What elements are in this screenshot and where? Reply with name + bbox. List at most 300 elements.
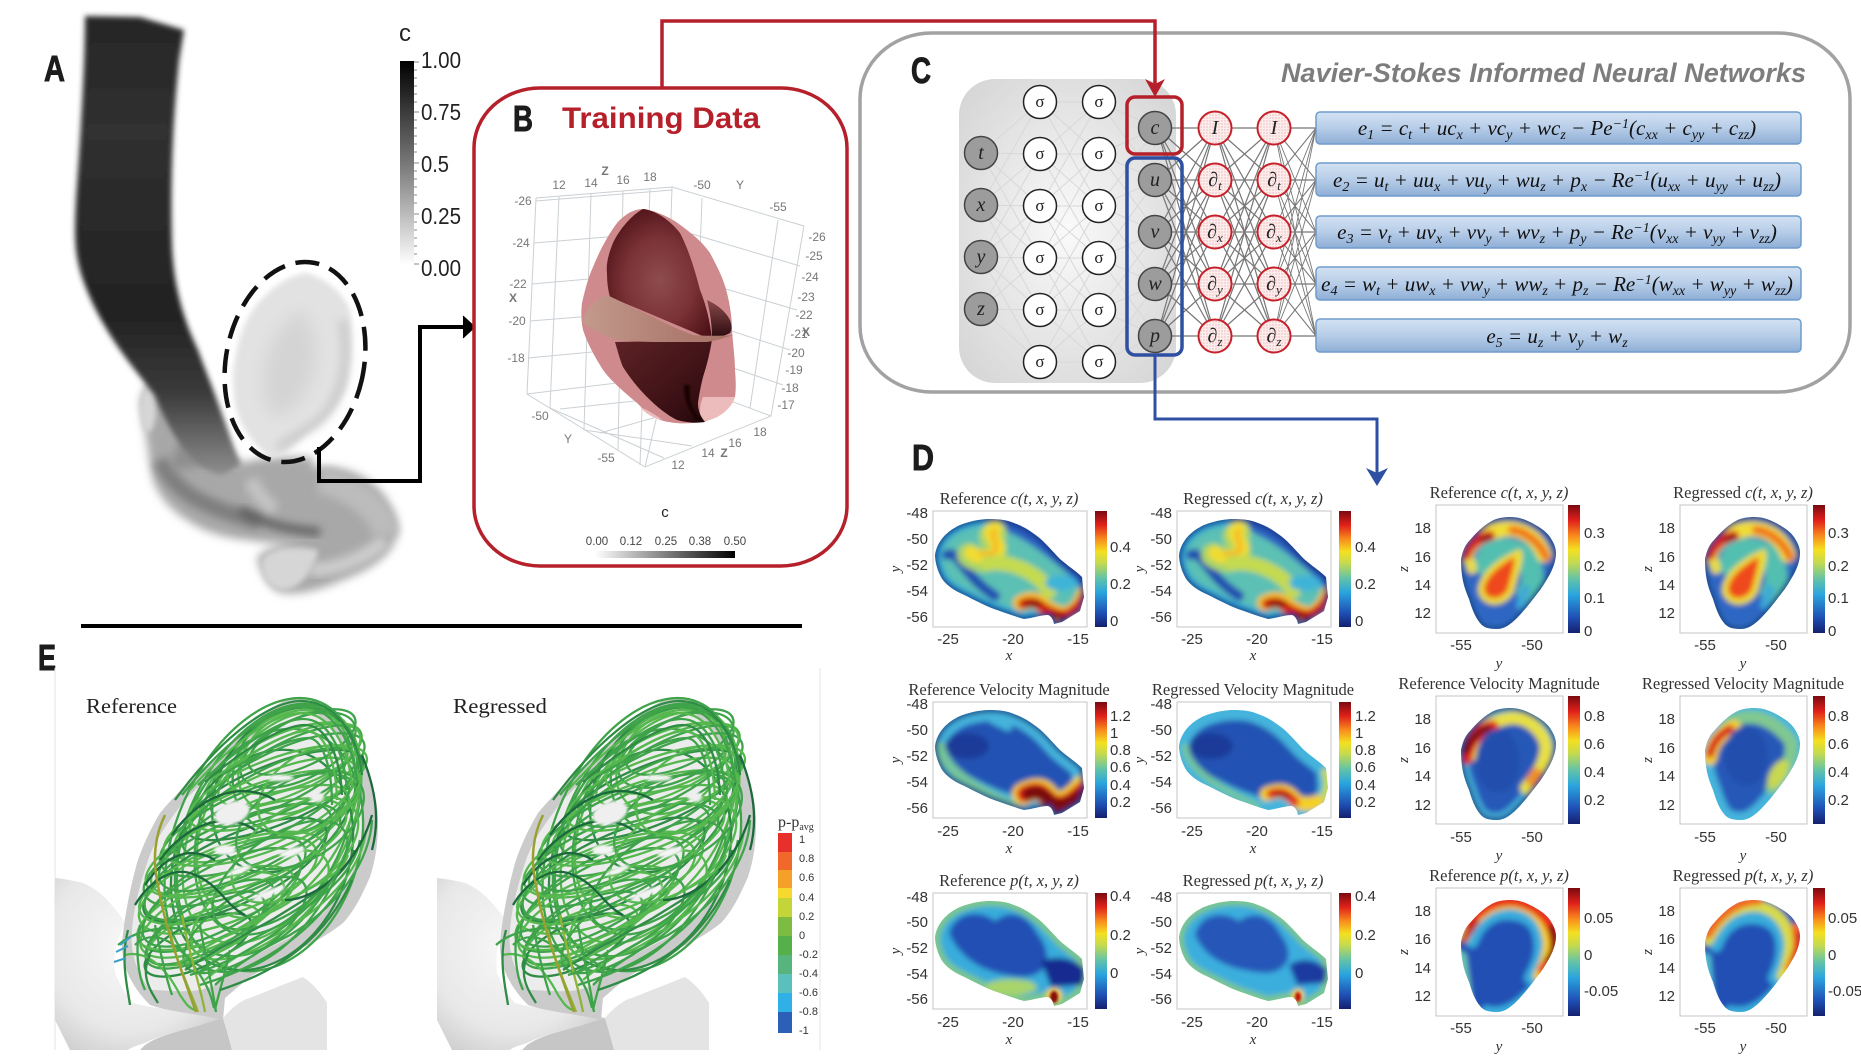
blue selection box around u v w p bbox=[1127, 158, 1182, 355]
3D axis labels bbox=[507, 164, 826, 472]
derivative nodes: z bbox=[1216, 334, 1222, 349]
equation e1: t bbox=[1408, 128, 1413, 143]
plot: regressed c xy: Regressed c(t, x, y, z) bbox=[1183, 489, 1323, 508]
plot: regressed velocity yz: 14 bbox=[1658, 768, 1675, 785]
plot: reference p xy: -48 bbox=[906, 889, 928, 906]
left anatomy with reference streamlines bbox=[55, 668, 399, 1050]
plot: regressed c xy: -20 bbox=[1246, 631, 1268, 648]
plot: regressed p xy: -56 bbox=[1150, 991, 1172, 1008]
plot: regressed c yz: Regressed c(t, x, y, z) bbox=[1673, 483, 1813, 502]
3D axis labels: -26 bbox=[808, 230, 826, 244]
plot: regressed c xy: 0.4 bbox=[1355, 539, 1376, 556]
label E: E bbox=[38, 637, 56, 678]
plot: regressed p xy: 0.2 bbox=[1355, 927, 1376, 944]
arrow from network outputs to panel D bbox=[1155, 355, 1388, 486]
plot: regressed c xy: x bbox=[1249, 648, 1257, 664]
3D axes grid bbox=[527, 187, 804, 467]
colorbar c: 0.25 bbox=[421, 203, 461, 229]
hidden layer nodes: σ bbox=[1094, 300, 1104, 319]
plot: reference p xy: 0 bbox=[1110, 965, 1118, 982]
plot: regressed velocity yz: Regressed Velocity Magnitude bbox=[1642, 674, 1844, 693]
equation e1: x bbox=[1456, 128, 1464, 143]
hidden layer nodes: σ bbox=[1094, 92, 1104, 111]
plot: regressed p yz: 18 bbox=[1658, 903, 1675, 920]
plot: reference c xy: -48 bbox=[906, 505, 928, 522]
colorbar c: 1.00 bbox=[421, 47, 461, 73]
equation e3 bbox=[1316, 216, 1801, 248]
hidden layer nodes: σ bbox=[1094, 248, 1104, 267]
plot: reference p xy: 0.4 bbox=[1110, 888, 1131, 905]
equation e3: zz bbox=[1758, 232, 1770, 247]
equation e2: −1 bbox=[1634, 169, 1650, 184]
equation e4: = w bbox=[1337, 272, 1376, 296]
plot: regressed p xy: -50 bbox=[1150, 914, 1172, 931]
equation e5: z bbox=[1621, 336, 1628, 351]
equation e1: y bbox=[1504, 128, 1513, 143]
equation e3: y bbox=[1483, 232, 1492, 247]
derivative nodes bbox=[1198, 112, 1290, 352]
plot: regressed velocity xy: 1 bbox=[1355, 725, 1363, 742]
plot: regressed c yz: 14 bbox=[1658, 577, 1675, 594]
3D axis labels: 12 bbox=[671, 458, 685, 472]
equation e3: (v bbox=[1650, 220, 1667, 244]
derivative nodes: y bbox=[1215, 282, 1223, 297]
equation e1: 1 bbox=[1367, 128, 1374, 143]
derivative nodes: x bbox=[1275, 230, 1282, 245]
equation e4: (w bbox=[1652, 272, 1673, 296]
plot: reference p yz: 0.05 bbox=[1584, 910, 1613, 927]
equation e2: y bbox=[1483, 180, 1492, 195]
plot: reference velocity yz: 0.6 bbox=[1584, 736, 1605, 753]
label B: B bbox=[513, 98, 533, 139]
3D axis labels: X bbox=[802, 325, 810, 339]
plot: reference velocity xy: x bbox=[1005, 841, 1013, 857]
output nodes c u v w p: p bbox=[1148, 325, 1160, 347]
plot: reference velocity xy: 1.2 bbox=[1110, 708, 1131, 725]
equation e4: xx bbox=[1672, 284, 1686, 299]
equation e2: − Re bbox=[1587, 168, 1634, 192]
plot: regressed velocity yz: 16 bbox=[1658, 740, 1675, 757]
plot: reference p xy: -20 bbox=[1002, 1014, 1024, 1031]
equation e2: = u bbox=[1349, 168, 1385, 192]
plot: reference c yz: -50 bbox=[1521, 637, 1543, 654]
plot: reference velocity yz: 18 bbox=[1414, 711, 1431, 728]
derivative nodes: ∂ bbox=[1267, 169, 1277, 191]
equation e5: z bbox=[1537, 336, 1544, 351]
network connections bbox=[981, 102, 1316, 362]
colorbar c: 0.50 bbox=[724, 536, 746, 548]
pressure colorbar: 0 bbox=[799, 930, 805, 942]
plot: regressed velocity yz: 0.6 bbox=[1828, 736, 1849, 753]
equation e2: (u bbox=[1650, 168, 1668, 192]
colorbar c: 0.75 bbox=[421, 99, 461, 125]
right anatomy with regressed streamlines bbox=[437, 668, 777, 1050]
pressure colorbar: 0.8 bbox=[799, 853, 814, 865]
equation e2: t bbox=[1385, 180, 1390, 195]
equation e4: −1 bbox=[1635, 273, 1652, 288]
equation e1: − Pe bbox=[1566, 116, 1613, 140]
plot: reference c xy: -20 bbox=[1002, 631, 1024, 648]
equation e1: ) bbox=[1748, 116, 1756, 140]
plot: regressed p yz bbox=[1640, 866, 1861, 1055]
plot: reference p yz: -0.05 bbox=[1584, 983, 1618, 1000]
equation e2: + wu bbox=[1491, 168, 1540, 192]
equation e3: e bbox=[1337, 220, 1346, 244]
plot: reference c xy: -25 bbox=[937, 631, 959, 648]
equation e2: ) bbox=[1773, 168, 1781, 192]
plot: regressed velocity xy: -20 bbox=[1246, 823, 1268, 840]
plot: reference c xy: -54 bbox=[906, 583, 928, 600]
equation e4: 4 bbox=[1330, 284, 1337, 299]
plot: reference p xy: x bbox=[1005, 1032, 1013, 1048]
equation e4: yy bbox=[1722, 284, 1737, 299]
plot: reference c yz: -55 bbox=[1450, 637, 1472, 654]
hidden layer nodes: σ bbox=[1035, 92, 1045, 111]
plot: reference velocity yz: 0.4 bbox=[1584, 764, 1605, 781]
3D axis labels: -17 bbox=[777, 398, 795, 412]
hidden layer nodes: σ bbox=[1035, 352, 1045, 371]
equation e1: yy bbox=[1690, 128, 1705, 143]
plot: regressed c xy: -50 bbox=[1150, 531, 1172, 548]
hidden layer nodes: σ bbox=[1035, 144, 1045, 163]
derivative nodes: t bbox=[1218, 178, 1222, 193]
panel border bbox=[474, 88, 847, 566]
equation e4: − Re bbox=[1588, 272, 1635, 296]
plot: reference velocity yz: z bbox=[1396, 757, 1412, 764]
plot: regressed velocity yz: 18 bbox=[1658, 711, 1675, 728]
label A: A bbox=[44, 48, 65, 89]
panel C: Navier-Stokes informed neural networks bbox=[860, 33, 1850, 392]
equation e1: (c bbox=[1629, 116, 1646, 140]
panel B: training data bbox=[474, 88, 847, 566]
equation e3: yy bbox=[1711, 232, 1726, 247]
plot: reference p xy: 0.2 bbox=[1110, 927, 1131, 944]
equation e2: e bbox=[1333, 168, 1342, 192]
3D axis labels: -24 bbox=[801, 270, 819, 284]
panel border bbox=[860, 33, 1850, 392]
3D axis labels: -24 bbox=[512, 236, 530, 250]
plot: regressed c yz: z bbox=[1640, 566, 1656, 573]
colorbar c: 0.38 bbox=[689, 536, 711, 548]
equation e2: + uu bbox=[1388, 168, 1434, 192]
arrow from A to B bbox=[319, 316, 475, 481]
derivative nodes: t bbox=[1277, 178, 1281, 193]
plot: reference velocity yz: 0.2 bbox=[1584, 792, 1605, 809]
plot: regressed p yz: -55 bbox=[1694, 1020, 1716, 1037]
plot: regressed velocity xy: 1.2 bbox=[1355, 708, 1376, 725]
plot: regressed p xy: y bbox=[1132, 947, 1148, 956]
equation e4: + w bbox=[1685, 272, 1724, 296]
plot: regressed p xy: -54 bbox=[1150, 966, 1172, 983]
plot: reference velocity xy: 1 bbox=[1110, 725, 1118, 742]
3D axis labels: -50 bbox=[531, 409, 549, 423]
plot: reference c yz: 0.2 bbox=[1584, 558, 1605, 575]
equation e3: z bbox=[1539, 232, 1546, 247]
plot: regressed c yz: y bbox=[1738, 656, 1747, 672]
pressure colorbar: p-p bbox=[778, 814, 799, 831]
hidden layer nodes: σ bbox=[1094, 196, 1104, 215]
plot: regressed c xy: -54 bbox=[1150, 583, 1172, 600]
3D axis labels: -26 bbox=[514, 194, 532, 208]
plot: regressed c xy: -25 bbox=[1181, 631, 1203, 648]
equation e4: z bbox=[1582, 284, 1589, 299]
plot: regressed p yz: y bbox=[1738, 1039, 1747, 1055]
image frame lines bbox=[55, 668, 820, 1050]
caption Regressed: Regressed bbox=[453, 694, 548, 718]
plot: regressed velocity yz bbox=[1640, 674, 1849, 864]
neural network background bbox=[959, 79, 1176, 383]
plot: reference p xy: y bbox=[888, 947, 904, 956]
plot: reference velocity yz: 14 bbox=[1414, 768, 1431, 785]
plot: regressed c yz: -50 bbox=[1765, 637, 1787, 654]
plot: reference velocity xy: -56 bbox=[906, 800, 928, 817]
plot: regressed velocity xy: y bbox=[1132, 756, 1148, 765]
colorbar c: 0.12 bbox=[620, 536, 642, 548]
equation e4: + vw bbox=[1435, 272, 1483, 296]
plot: regressed p yz: 12 bbox=[1658, 988, 1675, 1005]
plot: reference c xy: Reference c(t, x, y, z) bbox=[940, 489, 1078, 508]
plot: reference p xy: -25 bbox=[937, 1014, 959, 1031]
3D axis labels: -18 bbox=[781, 381, 799, 395]
plot: regressed p yz: Regressed p(t, x, y, z) bbox=[1673, 866, 1813, 885]
plot: reference p xy: -50 bbox=[906, 914, 928, 931]
equation e4: x bbox=[1428, 284, 1436, 299]
plot: reference p yz: z bbox=[1396, 949, 1412, 956]
equation e1: + vc bbox=[1463, 116, 1507, 140]
3D axis labels: -22 bbox=[509, 277, 527, 291]
red selection box around c bbox=[1127, 97, 1182, 154]
plot: reference c xy: 0 bbox=[1110, 613, 1118, 630]
plot: reference p yz: 18 bbox=[1414, 903, 1431, 920]
colorbar c: c bbox=[661, 504, 669, 521]
plot: regressed c xy: -52 bbox=[1150, 557, 1172, 574]
plot: reference c xy: y bbox=[888, 565, 904, 574]
output nodes c u v w p: u bbox=[1150, 169, 1160, 191]
derivative nodes: x bbox=[1216, 230, 1223, 245]
plot: reference velocity yz: 0.8 bbox=[1584, 708, 1605, 725]
plot: regressed velocity xy: 0.4 bbox=[1355, 777, 1376, 794]
pressure colorbar: -0.2 bbox=[799, 949, 818, 961]
pressure colorbar: -0.6 bbox=[799, 987, 818, 999]
plot: regressed velocity xy: 0.8 bbox=[1355, 742, 1376, 759]
plot: reference velocity xy: 0.6 bbox=[1110, 759, 1131, 776]
hidden layer nodes: σ bbox=[1094, 352, 1104, 371]
3D axis labels: -22 bbox=[795, 308, 813, 322]
plot: regressed p xy bbox=[1132, 871, 1376, 1048]
plot: regressed c yz: -55 bbox=[1694, 637, 1716, 654]
equation e2: + u bbox=[1680, 168, 1715, 192]
plot: regressed velocity xy: 0.6 bbox=[1355, 759, 1376, 776]
3D axis labels: 14 bbox=[584, 176, 598, 190]
equation e3: ) bbox=[1769, 220, 1777, 244]
plot: regressed velocity xy: -52 bbox=[1150, 748, 1172, 765]
panel D: regressed fields bbox=[888, 437, 1861, 1055]
plot: reference velocity xy: -50 bbox=[906, 722, 928, 739]
caption Reference: Reference bbox=[86, 694, 177, 718]
equation e3: + wv bbox=[1492, 220, 1540, 244]
equation e3: t bbox=[1387, 232, 1392, 247]
plot: regressed c yz: 18 bbox=[1658, 520, 1675, 537]
atrium 3D slices bbox=[581, 209, 736, 423]
plot: regressed c yz: 12 bbox=[1658, 605, 1675, 622]
equation e5: + v bbox=[1543, 324, 1578, 348]
colorbar c: c bbox=[399, 20, 411, 47]
equation e2: + p bbox=[1546, 168, 1581, 192]
plot: reference p yz: 16 bbox=[1414, 931, 1431, 948]
plot: regressed p xy: -48 bbox=[1150, 889, 1172, 906]
equation e1: + uc bbox=[1412, 116, 1457, 140]
equation e1: z bbox=[1559, 128, 1566, 143]
pressure colorbar: -0.4 bbox=[799, 968, 818, 980]
derivative nodes: ∂ bbox=[1266, 221, 1276, 243]
atrium light region bbox=[233, 273, 351, 458]
plot: regressed velocity xy: Regressed Velocity Magnitude bbox=[1152, 680, 1354, 699]
plot: reference velocity yz: y bbox=[1494, 848, 1503, 864]
plot: regressed p xy: 0.4 bbox=[1355, 888, 1376, 905]
plot: reference p xy: -52 bbox=[906, 940, 928, 957]
equation e2: + u bbox=[1728, 168, 1763, 192]
equation e4: z bbox=[1541, 284, 1548, 299]
plot: reference c xy: 0.2 bbox=[1110, 576, 1131, 593]
plot: regressed velocity xy: 0.2 bbox=[1355, 794, 1376, 811]
equation e4: ) bbox=[1785, 272, 1793, 296]
derivative nodes: ∂ bbox=[1207, 273, 1217, 295]
plot: regressed p yz: -50 bbox=[1765, 1020, 1787, 1037]
input nodes t x y z: t bbox=[978, 142, 984, 164]
colorbar c: 0.00 bbox=[586, 536, 608, 548]
plot: regressed velocity yz: z bbox=[1640, 757, 1656, 764]
plot: reference p yz: 0 bbox=[1584, 947, 1592, 964]
equation e3: −1 bbox=[1633, 221, 1650, 236]
equation e5 bbox=[1316, 319, 1801, 352]
equation e3: x bbox=[1435, 232, 1443, 247]
derivative nodes: ∂ bbox=[1207, 221, 1217, 243]
colorbar c: 0.00 bbox=[421, 255, 461, 281]
equation e4: t bbox=[1376, 284, 1381, 299]
equation e3: xx bbox=[1665, 232, 1679, 247]
plot: regressed c xy: y bbox=[1132, 565, 1148, 574]
plot: reference p yz: 12 bbox=[1414, 988, 1431, 1005]
3D axis labels: -25 bbox=[805, 249, 823, 263]
equation e1: + c bbox=[1704, 116, 1739, 140]
equation e2: 2 bbox=[1342, 180, 1349, 195]
derivative nodes: I bbox=[1270, 117, 1279, 139]
plot: regressed c xy: -48 bbox=[1150, 505, 1172, 522]
plot: regressed velocity xy: -56 bbox=[1150, 800, 1172, 817]
plot: regressed velocity yz: 0.4 bbox=[1828, 764, 1849, 781]
equation e5: + w bbox=[1584, 324, 1622, 348]
equation e3: 3 bbox=[1345, 232, 1353, 247]
3D axis labels: -18 bbox=[507, 351, 525, 365]
plot: reference p yz: Reference p(t, x, y, z) bbox=[1429, 866, 1569, 885]
derivative nodes: I bbox=[1211, 117, 1220, 139]
equation e3: + v bbox=[1725, 220, 1760, 244]
plot: regressed c yz bbox=[1640, 483, 1849, 672]
plot: reference velocity xy: Reference Velocity Magnitude bbox=[908, 680, 1110, 699]
plot: reference velocity xy: -25 bbox=[937, 823, 959, 840]
equation e1 bbox=[1316, 112, 1801, 144]
plot: regressed velocity xy: -50 bbox=[1150, 722, 1172, 739]
plot: reference velocity xy: y bbox=[888, 756, 904, 765]
equation e1: = c bbox=[1374, 116, 1409, 140]
plot: regressed velocity xy bbox=[1132, 680, 1376, 857]
equation e3: − Re bbox=[1586, 220, 1633, 244]
plot: regressed p xy: x bbox=[1249, 1032, 1257, 1048]
plot: regressed p xy: Regressed p(t, x, y, z) bbox=[1183, 871, 1323, 890]
derivative nodes: z bbox=[1275, 334, 1281, 349]
plot: reference p yz: -55 bbox=[1450, 1020, 1472, 1037]
plot: regressed p xy: -15 bbox=[1311, 1014, 1333, 1031]
equation e1: zz bbox=[1737, 128, 1750, 143]
plot: regressed p yz: z bbox=[1640, 949, 1656, 956]
3D axis labels: -20 bbox=[508, 314, 526, 328]
jet and body volume render bbox=[75, 16, 398, 593]
plot: reference velocity yz: 16 bbox=[1414, 740, 1431, 757]
derivative nodes: ∂ bbox=[1266, 273, 1276, 295]
equation e3: + v bbox=[1679, 220, 1713, 244]
input nodes t x y z bbox=[964, 136, 998, 326]
plot: reference velocity yz: Reference Velocity Magnitude bbox=[1398, 674, 1600, 693]
equation e4: + uw bbox=[1380, 272, 1429, 296]
plot: regressed velocity xy: -54 bbox=[1150, 774, 1172, 791]
plot: regressed p xy: 0 bbox=[1355, 965, 1363, 982]
plot: reference c yz: 12 bbox=[1414, 605, 1431, 622]
plot: reference c xy: -52 bbox=[906, 557, 928, 574]
equation e5: e bbox=[1486, 324, 1496, 348]
plot: regressed c xy: -56 bbox=[1150, 609, 1172, 626]
hidden layer nodes: σ bbox=[1094, 144, 1104, 163]
derivative nodes: ∂ bbox=[1208, 169, 1218, 191]
hidden layer nodes: σ bbox=[1035, 248, 1045, 267]
equation e2: x bbox=[1433, 180, 1441, 195]
plot: regressed c xy bbox=[1132, 489, 1376, 664]
plot: reference p xy: -54 bbox=[906, 966, 928, 983]
plot: reference velocity xy: -48 bbox=[906, 696, 928, 713]
3D axis labels: -55 bbox=[597, 451, 615, 465]
plot: regressed c yz: 0.1 bbox=[1828, 590, 1849, 607]
plot: regressed c xy: 0.2 bbox=[1355, 576, 1376, 593]
equation e2: yy bbox=[1713, 180, 1729, 195]
plot: reference c xy: -50 bbox=[906, 531, 928, 548]
plot: reference p yz: 14 bbox=[1414, 960, 1431, 977]
3D axis labels: 12 bbox=[552, 178, 566, 192]
plot: regressed p yz: 16 bbox=[1658, 931, 1675, 948]
pressure colorbar: 0.4 bbox=[799, 892, 814, 904]
plot: reference p xy bbox=[888, 871, 1131, 1048]
output nodes c u v w p: w bbox=[1148, 273, 1162, 295]
plot: regressed c xy: 0 bbox=[1355, 613, 1363, 630]
3D axis labels: -50 bbox=[693, 178, 711, 192]
derivative nodes: ∂ bbox=[1208, 325, 1217, 347]
equation e4 bbox=[1316, 267, 1801, 300]
plot: regressed velocity yz: 0.2 bbox=[1828, 792, 1849, 809]
plot: reference c xy: -15 bbox=[1067, 631, 1089, 648]
plot: reference p yz bbox=[1396, 866, 1618, 1055]
pressure colorbar: 0.6 bbox=[799, 872, 814, 884]
equation e3: + uv bbox=[1391, 220, 1437, 244]
panel E: streamlines bbox=[38, 637, 820, 1050]
colorbar c bbox=[399, 20, 461, 281]
equation e2: x bbox=[1580, 180, 1588, 195]
equation e4: + w bbox=[1736, 272, 1775, 296]
input nodes t x y z: y bbox=[975, 246, 986, 268]
plot: reference velocity yz bbox=[1396, 674, 1605, 864]
plot: reference velocity xy: 0.4 bbox=[1110, 777, 1131, 794]
plot: regressed c yz: 0 bbox=[1828, 623, 1836, 640]
equation e2: + vu bbox=[1440, 168, 1485, 192]
plot: regressed p yz: 14 bbox=[1658, 960, 1675, 977]
plot: reference c xy bbox=[888, 489, 1131, 664]
